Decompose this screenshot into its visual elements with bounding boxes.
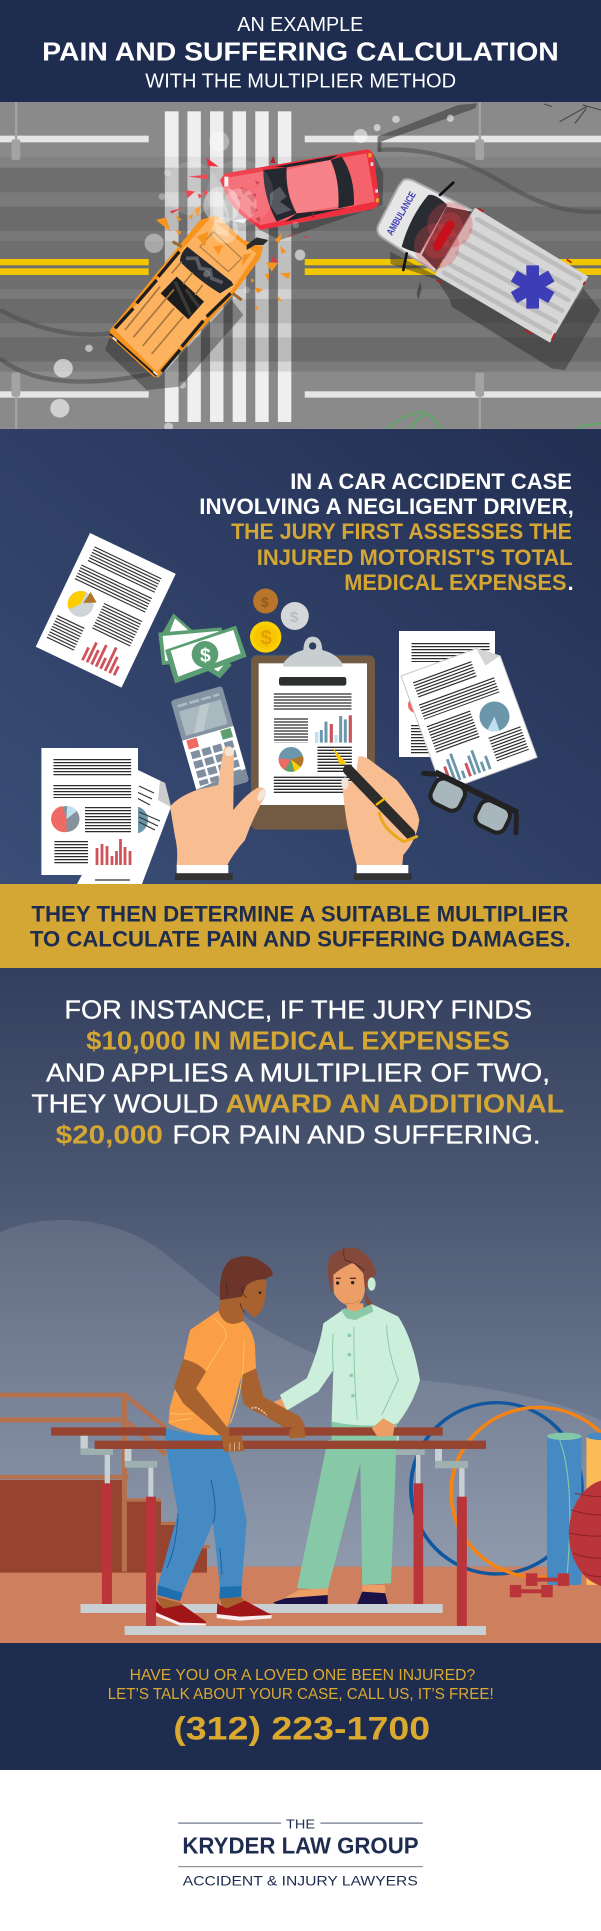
street posts xyxy=(11,102,484,429)
medical expenses text xyxy=(199,469,574,595)
crash smoke xyxy=(159,160,305,293)
money xyxy=(158,613,247,683)
vehicle shadows xyxy=(105,153,383,390)
medical expenses text: MEDICAL EXPENSES xyxy=(344,570,566,595)
footer call to action xyxy=(0,1643,601,1770)
panel: medical expenses xyxy=(0,429,601,884)
coins: $ xyxy=(261,594,269,610)
patient near hand xyxy=(222,1435,245,1452)
footer call to action: LET’S TALK ABOUT YOUR CASE, CALL US, IT’S FREE! xyxy=(108,1686,494,1703)
crosswalk xyxy=(165,111,291,422)
gold coin: $ xyxy=(260,627,272,650)
parallel bars: front xyxy=(125,1449,486,1635)
title: PAIN AND SUFFERING CALCULATION xyxy=(42,39,559,67)
patient far hand xyxy=(289,1421,306,1438)
glasses xyxy=(414,768,524,841)
clipboard and desk items xyxy=(158,613,375,830)
left hand xyxy=(170,746,268,880)
pole shadow xyxy=(378,103,477,152)
footer call to action: HAVE YOU OR A LOVED ONE BEEN INJURED? xyxy=(130,1667,476,1684)
example text: AND APPLIES A MULTIPLIER OF TWO, xyxy=(46,1057,550,1087)
roadside plant xyxy=(544,104,601,123)
document: stacked bottom left xyxy=(41,748,171,884)
calculator xyxy=(171,686,249,796)
logo: KRYDER LAW GROUP xyxy=(182,1832,419,1858)
ambulance xyxy=(377,179,600,370)
dumbbells xyxy=(510,1573,569,1597)
background hill xyxy=(0,1220,601,1567)
document: tilted top left xyxy=(36,533,176,688)
pen xyxy=(333,748,417,842)
red car xyxy=(220,149,379,230)
band: multiplier: THEY THEN DETERMINE A SUITABLE MULTIPLIER xyxy=(31,901,569,926)
patient legs xyxy=(156,1428,272,1626)
patient upper body xyxy=(168,1256,306,1452)
panel: example and therapy scene xyxy=(0,968,601,1643)
lane markings xyxy=(0,136,601,398)
example text: FOR INSTANCE, IF THE JURY FINDS xyxy=(64,995,532,1025)
example text: THEY WOULD xyxy=(31,1088,218,1118)
medical expenses text: . xyxy=(568,570,574,595)
exercise ball xyxy=(569,1479,601,1587)
hoops xyxy=(411,1403,601,1577)
front rail xyxy=(95,1441,486,1449)
therapist hand xyxy=(372,1418,395,1437)
medical expenses text: INJURED MOTORIST'S TOTAL xyxy=(257,545,573,570)
crash debris xyxy=(156,157,307,311)
crash vehicles xyxy=(105,149,383,390)
medical expenses text: INVOLVING A NEGLIGENT DRIVER, xyxy=(199,494,574,519)
example text: FOR PAIN AND SUFFERING. xyxy=(172,1119,540,1149)
smoke puffs xyxy=(50,115,454,431)
parallel bars: back xyxy=(80,1436,443,1613)
stairs and railing xyxy=(0,1393,210,1573)
grass xyxy=(387,412,601,429)
medical expenses text: IN A CAR ACCIDENT CASE xyxy=(290,469,572,494)
right hand xyxy=(341,756,419,880)
logo: ACCIDENT & INJURY LAWYERS xyxy=(183,1872,418,1888)
ambulance: AMBULANCE xyxy=(385,190,419,237)
document: right stack xyxy=(399,631,537,792)
skid marks xyxy=(0,150,601,382)
therapist legs xyxy=(273,1422,397,1604)
clipboard xyxy=(251,637,375,830)
therapy scene xyxy=(0,1220,601,1643)
gold coin xyxy=(250,621,281,653)
therapist upper body xyxy=(271,1248,420,1425)
header band xyxy=(0,0,601,102)
floor xyxy=(0,1567,601,1643)
orange truck xyxy=(110,215,268,377)
band: multiplier: TO CALCULATE PAIN AND SUFFERING DAMAGES. xyxy=(30,926,571,951)
header kicker: AN EXAMPLE xyxy=(237,14,363,36)
yoga mats xyxy=(547,1433,601,1585)
hands and pen xyxy=(170,746,419,880)
medical expenses text: THE JURY FIRST ASSESSES THE xyxy=(231,519,572,544)
rails and front bars xyxy=(51,1418,486,1635)
road scene xyxy=(0,102,601,431)
subtitle: WITH THE MULTIPLIER METHOD xyxy=(145,70,456,92)
logo: THE xyxy=(286,1817,315,1832)
money: $ xyxy=(200,646,211,667)
example text xyxy=(31,995,564,1149)
coins: $ xyxy=(290,609,299,626)
phone number: (312) 223-1700 xyxy=(173,1710,430,1746)
back rail xyxy=(51,1427,443,1436)
band: multiplier xyxy=(0,884,601,968)
coins xyxy=(253,588,309,630)
example text: AWARD AN ADDITIONAL xyxy=(225,1088,564,1118)
example text: $20,000 xyxy=(56,1119,163,1149)
example text: $10,000 IN MEDICAL EXPENSES xyxy=(86,1026,510,1056)
logo xyxy=(178,1817,423,1888)
